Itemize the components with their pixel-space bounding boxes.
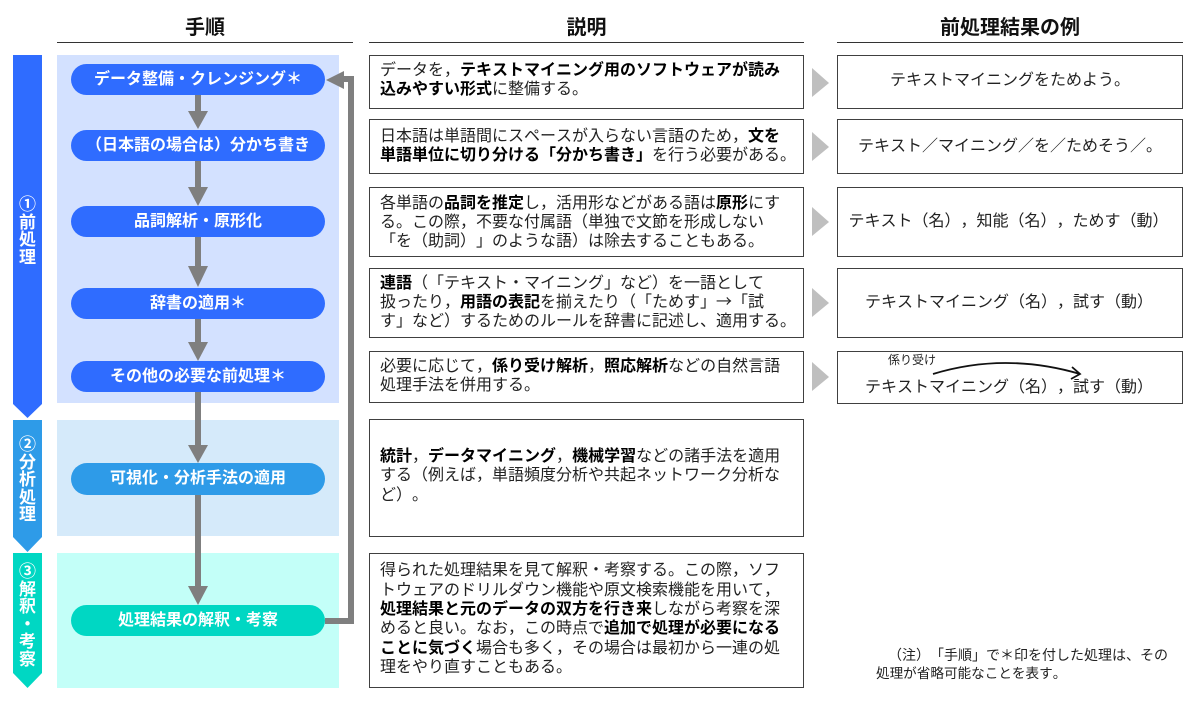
step: data cleansing [71,64,325,95]
heading: procedure: 手順 [185,11,225,40]
description 2: 日本語は単語間にスペースが入らない言語のため，文を [380,122,780,146]
phase 3 label: 解 [19,574,36,600]
example 4: テキストマイニング（名），試す（動） [865,288,1153,312]
heading: description: 説明 [566,11,606,40]
step: part of speech [71,206,325,237]
description 7: トウェアのドリルダウン機能や原文検索機能を用いて， [380,576,780,600]
phase 3 label [19,557,36,670]
description 6: ど）。 [380,481,428,505]
example 1: テキストマイニングをためよう。 [890,66,1130,90]
phase 1 label: 処 [19,225,36,250]
description 3 [369,187,804,257]
phase 2 label: ② [19,430,36,455]
phase 3 label: 察 [19,644,36,670]
phase 2 label: 析 [19,465,36,490]
phase 3 label: 考 [19,627,36,652]
description 3: 各単語の品詞を推定し，活用形などがある語は原形にす [380,189,780,213]
step: dictionary: 辞書の適用＊ [150,289,246,313]
description 7: 得られた処理結果を見て解釈・考察する。この際，ソフ [380,556,780,580]
step: other preprocessing: その他の必要な前処理＊ [110,362,286,386]
example 5: テキストマイニング（名），試す（動） [865,373,1153,397]
step: visualization and analysis: 可視化・分析手法の適用 [110,464,286,488]
description 3: 「を（助詞）」のような語）は除去することもある。 [380,227,764,251]
example 3 [837,187,1183,257]
phase 2 label [19,430,36,525]
phase 2 label: 理 [19,500,36,525]
panel: analysis background [57,420,339,536]
phase 1 label: 理 [19,242,36,268]
heading: example results: 前処理結果の例 [940,11,1080,40]
phase 3 label: ・ [19,610,36,634]
note: （注）「手順」で＊印を付した処理は、その [888,645,1168,665]
example 2: テキスト／マイニング／を／ためそう／。 [858,132,1162,156]
example 5 [837,351,1183,404]
description 7 [369,553,804,688]
panel: preprocessing background [57,55,339,403]
example 3: テキスト（名），知能（名），ためす（動） [848,207,1168,231]
phase 2 label: 処 [19,482,36,508]
phase 3 label: ③ [19,557,36,582]
description 2 [369,119,804,174]
panel: interpretation background [57,553,339,688]
dependency label: 係り受け [888,351,936,368]
description 7: めると良い。なお，この時点で追加で処理が必要になる [380,614,780,638]
phase 3 label: 釈 [19,592,36,617]
description 4 [369,268,804,338]
step: other preprocessing [71,361,325,392]
description 1: 込みやすい形式に整備する。 [380,75,588,99]
description 2: 単語単位に切り分ける「分かち書き」を行う必要がある。 [380,141,796,165]
example 2 [837,119,1183,174]
description 3: る。この際，不要な付属語（単独で文節を形成しない [380,208,764,232]
description 1 [369,55,804,109]
step: word segmentation: （日本語の場合は）分かち書き [86,131,310,155]
description 4: 扱ったり，用語の表記を揃えたり（「ためす」→「試 [380,288,764,312]
note: 処理が省略可能なことを表す。 [876,662,1066,682]
step: part of speech: 品詞解析・原形化 [134,207,262,231]
description 4: 連語（「テキスト・マイニング」など）を一語として [380,269,764,293]
description 1: データを，テキストマイニング用のソフトウェアが読み [380,56,780,80]
step: interpretation [71,605,325,636]
description 4: す」など）するためのルールを辞書に記述し、適用する。 [380,307,796,331]
example 1 [837,55,1183,109]
phase 1 label: 前 [19,208,36,232]
description 5: 処理手法を併用する。 [380,371,540,395]
note [876,645,1168,682]
description 6: する（例えば，単語頻度分析や共起ネットワーク分析な [380,461,780,485]
description 5: 必要に応じて，係り受け解析，照応解析などの自然言語 [380,352,780,376]
description 5 [369,351,804,403]
description 6 [369,419,804,537]
phase 1 label [19,190,36,268]
step: word segmentation [71,130,325,161]
description 7: 理をやり直すこともある。 [380,653,572,677]
phase 1 label: ① [19,190,36,215]
step: visualization and analysis [71,463,325,495]
step: interpretation: 処理結果の解釈・考察 [118,606,278,630]
step: data cleansing: データ整備・クレンジング＊ [94,65,302,89]
phase 2 label: 分 [19,448,36,472]
description 7: 処理結果と元のデータの双方を行き来しながら考察を深 [380,595,780,619]
step: dictionary [71,288,325,319]
example 4 [837,268,1183,338]
description 6: 統計，データマイニング，機械学習などの諸手法を適用 [380,442,780,466]
description 7: ことに気づく場合も多く，その場合は最初から一連の処 [380,634,780,658]
